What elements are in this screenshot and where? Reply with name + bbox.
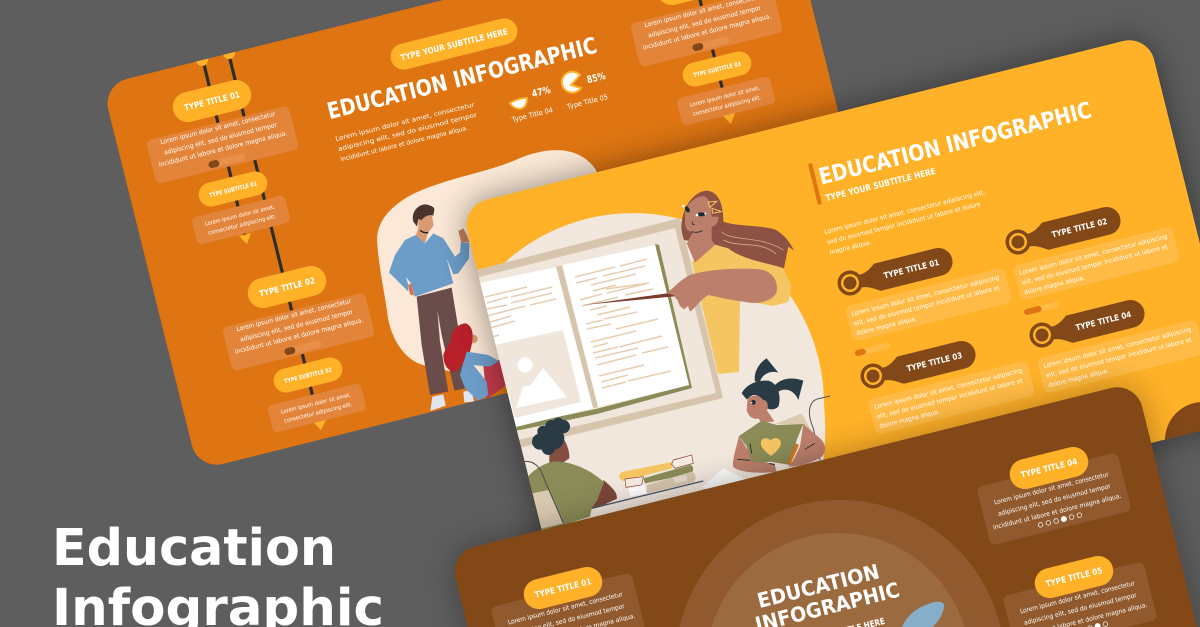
card 4 pill (1007, 444, 1091, 492)
item 3 box: dolore magna aliqua. (879, 409, 941, 430)
card 5 pill: TYPE TITLE 05 (1045, 566, 1104, 590)
pill: type subtitle 01: TYPE SUBTITLE 01 (209, 181, 258, 199)
item 3 box: Lorem ipsum dolor sit amet, consectetur adipiscing (874, 367, 1023, 411)
paper on desk (703, 468, 750, 498)
girl face (472, 334, 478, 344)
classroom board frame (472, 218, 723, 449)
text box 6: Lorem ipsum dolor sit amet, (689, 85, 761, 109)
item: type title 02: TYPE TITLE 02 (1051, 216, 1108, 239)
text box 1: adipiscing elit, sed do eiusmod tempor (163, 121, 278, 157)
item: type title 02 (1003, 192, 1180, 301)
pill: type subtitle 03: TYPE SUBTITLE 03 (693, 61, 742, 79)
girl body (460, 352, 499, 401)
illustration: cream circle backdrop (442, 213, 825, 600)
intro paragraph (335, 101, 481, 163)
text box 2: Lorem ipsum dolor sit amet, (204, 204, 276, 228)
item 4 box: elit, sed do eiusmod tempor incididunt ut labore et (1045, 336, 1193, 380)
man collar (420, 230, 428, 233)
girl backpack (483, 358, 507, 399)
item 4 box: dolore magna aliqua. (1048, 368, 1110, 389)
illustration: man (389, 204, 474, 411)
card 1 pill (521, 564, 605, 612)
arrow marker 3 (723, 113, 735, 124)
card 1 box (490, 572, 646, 627)
item 2 box: dolore magna aliqua. (1024, 275, 1086, 296)
yellow heading: EDUCATION INFOGRAPHIC (816, 97, 1094, 190)
girl arm lines (737, 443, 815, 465)
board inner (475, 228, 716, 441)
item 4 pin (1027, 297, 1148, 353)
teacher eyes (682, 205, 706, 216)
track end dots (196, 52, 235, 66)
stat: 47 percent: 47% (531, 85, 552, 100)
book cover edge (514, 244, 692, 431)
boy hair (532, 418, 570, 455)
left page (480, 267, 593, 427)
shadow of brown slide (449, 382, 1200, 627)
pill: type subtitle 01 (198, 171, 268, 207)
card 5 pagination dots (1064, 621, 1108, 627)
outer arch (675, 500, 1005, 627)
teacher face and neck (685, 196, 718, 263)
placeholder mountain (516, 368, 567, 408)
accent bar (808, 163, 822, 205)
teacher arm and hand (667, 269, 777, 312)
item 1 box: Lorem ipsum dolor sit amet, consectetur adipiscing (851, 274, 1000, 318)
item: type title 03: TYPE TITLE 03 (906, 350, 963, 373)
intro paragraph: Lorem ipsum dolor sit amet, consectetur (335, 101, 476, 143)
hair clips (708, 201, 721, 213)
pill: type subtitle 02 (274, 357, 342, 393)
text box 2 (191, 195, 291, 245)
top book (619, 462, 673, 481)
text box 3: adipiscing elit, sed do eiusmod tempor (239, 308, 354, 344)
text box 1: Lorem ipsum dolor sit amet, consectetur (160, 110, 276, 146)
shadow of yellow slide (461, 35, 1200, 591)
yellow paragraph: magna aliqua. (829, 239, 872, 256)
student girl (733, 358, 830, 473)
girl hair (742, 381, 780, 409)
text box 5 (630, 0, 783, 67)
bottom book label (673, 475, 687, 484)
pencil (788, 443, 799, 465)
arrow marker 1 (239, 233, 251, 244)
card 4 box: adipiscing elit, sed do eiusmod tempor (997, 482, 1112, 518)
right page text lines (575, 259, 671, 388)
stat: 85 percent: Type Title 05 (565, 93, 609, 111)
card 4 box: Lorem ipsum dolor sit amet, consectetur (993, 470, 1110, 506)
inner arch (706, 533, 970, 627)
boy lower back (532, 490, 563, 529)
main title: Education (52, 519, 336, 578)
pie icon 47 (509, 97, 529, 111)
left page text lines (485, 287, 556, 337)
illustration: cream blob (377, 150, 597, 380)
pill: type title 02 (248, 266, 326, 308)
card 5 box: adipiscing elit, sed do eiusmod tempor (1023, 591, 1138, 627)
item 3 pin (858, 338, 979, 394)
yellow paragraph: sed do eiusmod tempor incididunt ut labore et dolore (826, 201, 981, 246)
bottom book (647, 472, 696, 493)
stat: 85 percent: 85% (586, 71, 607, 86)
teacher mouth (692, 222, 703, 232)
text box 1: incididunt ut labore et dolore magna aliqua. (158, 129, 288, 169)
girl shirt (739, 421, 803, 465)
card 4 box (976, 452, 1132, 546)
item 1 box: dolore magna aliqua. (856, 316, 918, 337)
yellow subtitle: TYPE YOUR SUBTITLE HERE (825, 167, 937, 204)
heart (761, 438, 781, 456)
card: type title 04 (976, 444, 1132, 546)
intro paragraph: adipiscing elit, sed do eiusmod tempor (337, 112, 478, 153)
card 1 box: Lorem ipsum dolor sit amet, consectetur (507, 590, 624, 626)
tan box behind girl (775, 413, 816, 438)
bottom book pages (628, 484, 647, 497)
stat: 47 percent (509, 85, 554, 124)
teacher dress (692, 245, 792, 374)
main title (52, 519, 384, 627)
middle book (643, 465, 693, 483)
card: type title 01 (490, 564, 646, 627)
arrow marker 2 (314, 420, 326, 430)
image placeholder (495, 330, 581, 418)
pill: type title 02: TYPE TITLE 02 (258, 276, 316, 300)
man hip hand (408, 283, 414, 296)
pie icon 85 (562, 72, 581, 93)
heading: EDUCATION INFOGRAPHIC (325, 33, 600, 125)
subtitle pill: TYPE YOUR SUBTITLE HERE (400, 27, 509, 64)
item 3 box (868, 360, 1035, 435)
timeline tracks (203, 0, 729, 422)
text box 3: incididunt ut labore et dolore magna aliqua. (234, 316, 364, 356)
pill: type subtitle 02: TYPE SUBTITLE 02 (284, 367, 333, 385)
girl arms (733, 424, 825, 473)
teacher (583, 191, 794, 312)
item 2 box (1013, 226, 1180, 301)
pigtail top (755, 358, 778, 382)
text box 1 (146, 105, 299, 184)
man hair (413, 204, 434, 227)
text box 3 (222, 292, 375, 371)
item: type title 04: TYPE TITLE 04 (1075, 309, 1132, 332)
top book pages (672, 455, 693, 468)
text box 5: incididunt ut labore et dolore magna aliqua. (642, 12, 772, 52)
student boy (523, 418, 617, 530)
spine (556, 265, 599, 408)
stat: 47 percent: Type Title 04 (510, 106, 554, 124)
panel: yellow slide (442, 35, 1200, 600)
panel: orange slide (102, 0, 885, 470)
yellow paragraph (824, 189, 991, 256)
pill: type title 03 (660, 0, 694, 5)
teacher hair (681, 191, 794, 268)
placeholder sun (518, 358, 532, 372)
card 4 pagination dots (1038, 512, 1082, 528)
item 1 box (845, 267, 1012, 342)
card 4 pill: TYPE TITLE 04 (1020, 457, 1079, 481)
text box 6: consectetur adipiscing elit. (693, 95, 762, 118)
girl eye (751, 400, 756, 405)
item 1 box: elit, sed do eiusmod tempor incididunt ut labore et (853, 284, 1001, 328)
card 4 box: incididunt ut labore et dolore magna aliqua. (992, 492, 1122, 531)
item 4 box (1037, 319, 1200, 394)
boy face and neck (549, 438, 569, 463)
text box 5: adipiscing elit, sed do eiusmod tempor (647, 4, 762, 40)
item 2 pin (1003, 204, 1124, 260)
item 4 progress (1023, 301, 1060, 316)
hair highlights (722, 232, 783, 254)
subtitle pill (390, 18, 518, 70)
pointer stick (583, 292, 678, 305)
desk line (592, 481, 703, 508)
man raised hand (458, 228, 469, 243)
card 5 box (1002, 561, 1158, 627)
card: type title 05 (1002, 553, 1158, 627)
text box 3: Lorem ipsum dolor sit amet, consectetur (236, 297, 352, 333)
book stack and desk (592, 455, 750, 508)
pigtail right (775, 379, 803, 400)
girl hair (443, 323, 473, 372)
corner circle (1165, 402, 1200, 478)
middle book pages (625, 477, 643, 487)
item 2 box: Lorem ipsum dolor sit amet, consectetur adipiscing (1019, 233, 1168, 277)
open book (480, 244, 692, 431)
right page (562, 245, 689, 407)
pill: type title 01 (172, 80, 252, 122)
item: type title 03 (854, 311, 1035, 435)
man sweater (389, 233, 469, 297)
brown heading: EDUCATION (755, 559, 882, 613)
item 2 box: elit, sed do eiusmod tempor incididunt ut labore et (1021, 243, 1169, 287)
panel: brown slide (449, 382, 1200, 627)
man neck and face (416, 213, 434, 243)
item 3 box: elit, sed do eiusmod tempor incididunt ut labore et (876, 377, 1024, 421)
boy arm (589, 480, 617, 509)
text box 4 (267, 383, 367, 433)
text box 6 (676, 76, 776, 126)
item 3 progress (854, 342, 891, 357)
text box 2: consectetur adipiscing elit. (208, 214, 277, 237)
man legs (417, 288, 466, 395)
item 1 pin (835, 245, 956, 301)
man shoes (430, 390, 474, 411)
blue leaf (902, 602, 944, 627)
stat: 85 percent (562, 71, 609, 111)
wire (809, 396, 830, 460)
item: type title 04 (1023, 270, 1200, 394)
text box 4: Lorem ipsum dolor sit amet, (280, 392, 352, 416)
card 1 pill: TYPE TITLE 01 (534, 577, 593, 601)
item: type title 01 (835, 233, 1012, 342)
pill: type title 01: TYPE TITLE 01 (183, 90, 241, 114)
girl face and neck (747, 395, 774, 423)
illustration: seated girl (443, 323, 507, 401)
intro paragraph: incididunt ut labore et dolore magna aliqua. (340, 125, 469, 163)
pill: type subtitle 03 (682, 51, 752, 87)
boy wire (523, 461, 563, 523)
text box 4: consectetur adipiscing elit. (284, 402, 353, 425)
item 4 box: Lorem ipsum dolor sit amet, consectetur adipiscing (1043, 326, 1192, 370)
card 5 box: Lorem ipsum dolor sit amet, consectetur (1019, 579, 1136, 615)
card 5 pill (1032, 553, 1116, 601)
item: type title 01: TYPE TITLE 01 (883, 257, 940, 280)
boy shirt (526, 461, 604, 530)
yellow paragraph: Lorem ipsum dolor sit amet, consectetur adipiscing elit, (824, 189, 986, 236)
